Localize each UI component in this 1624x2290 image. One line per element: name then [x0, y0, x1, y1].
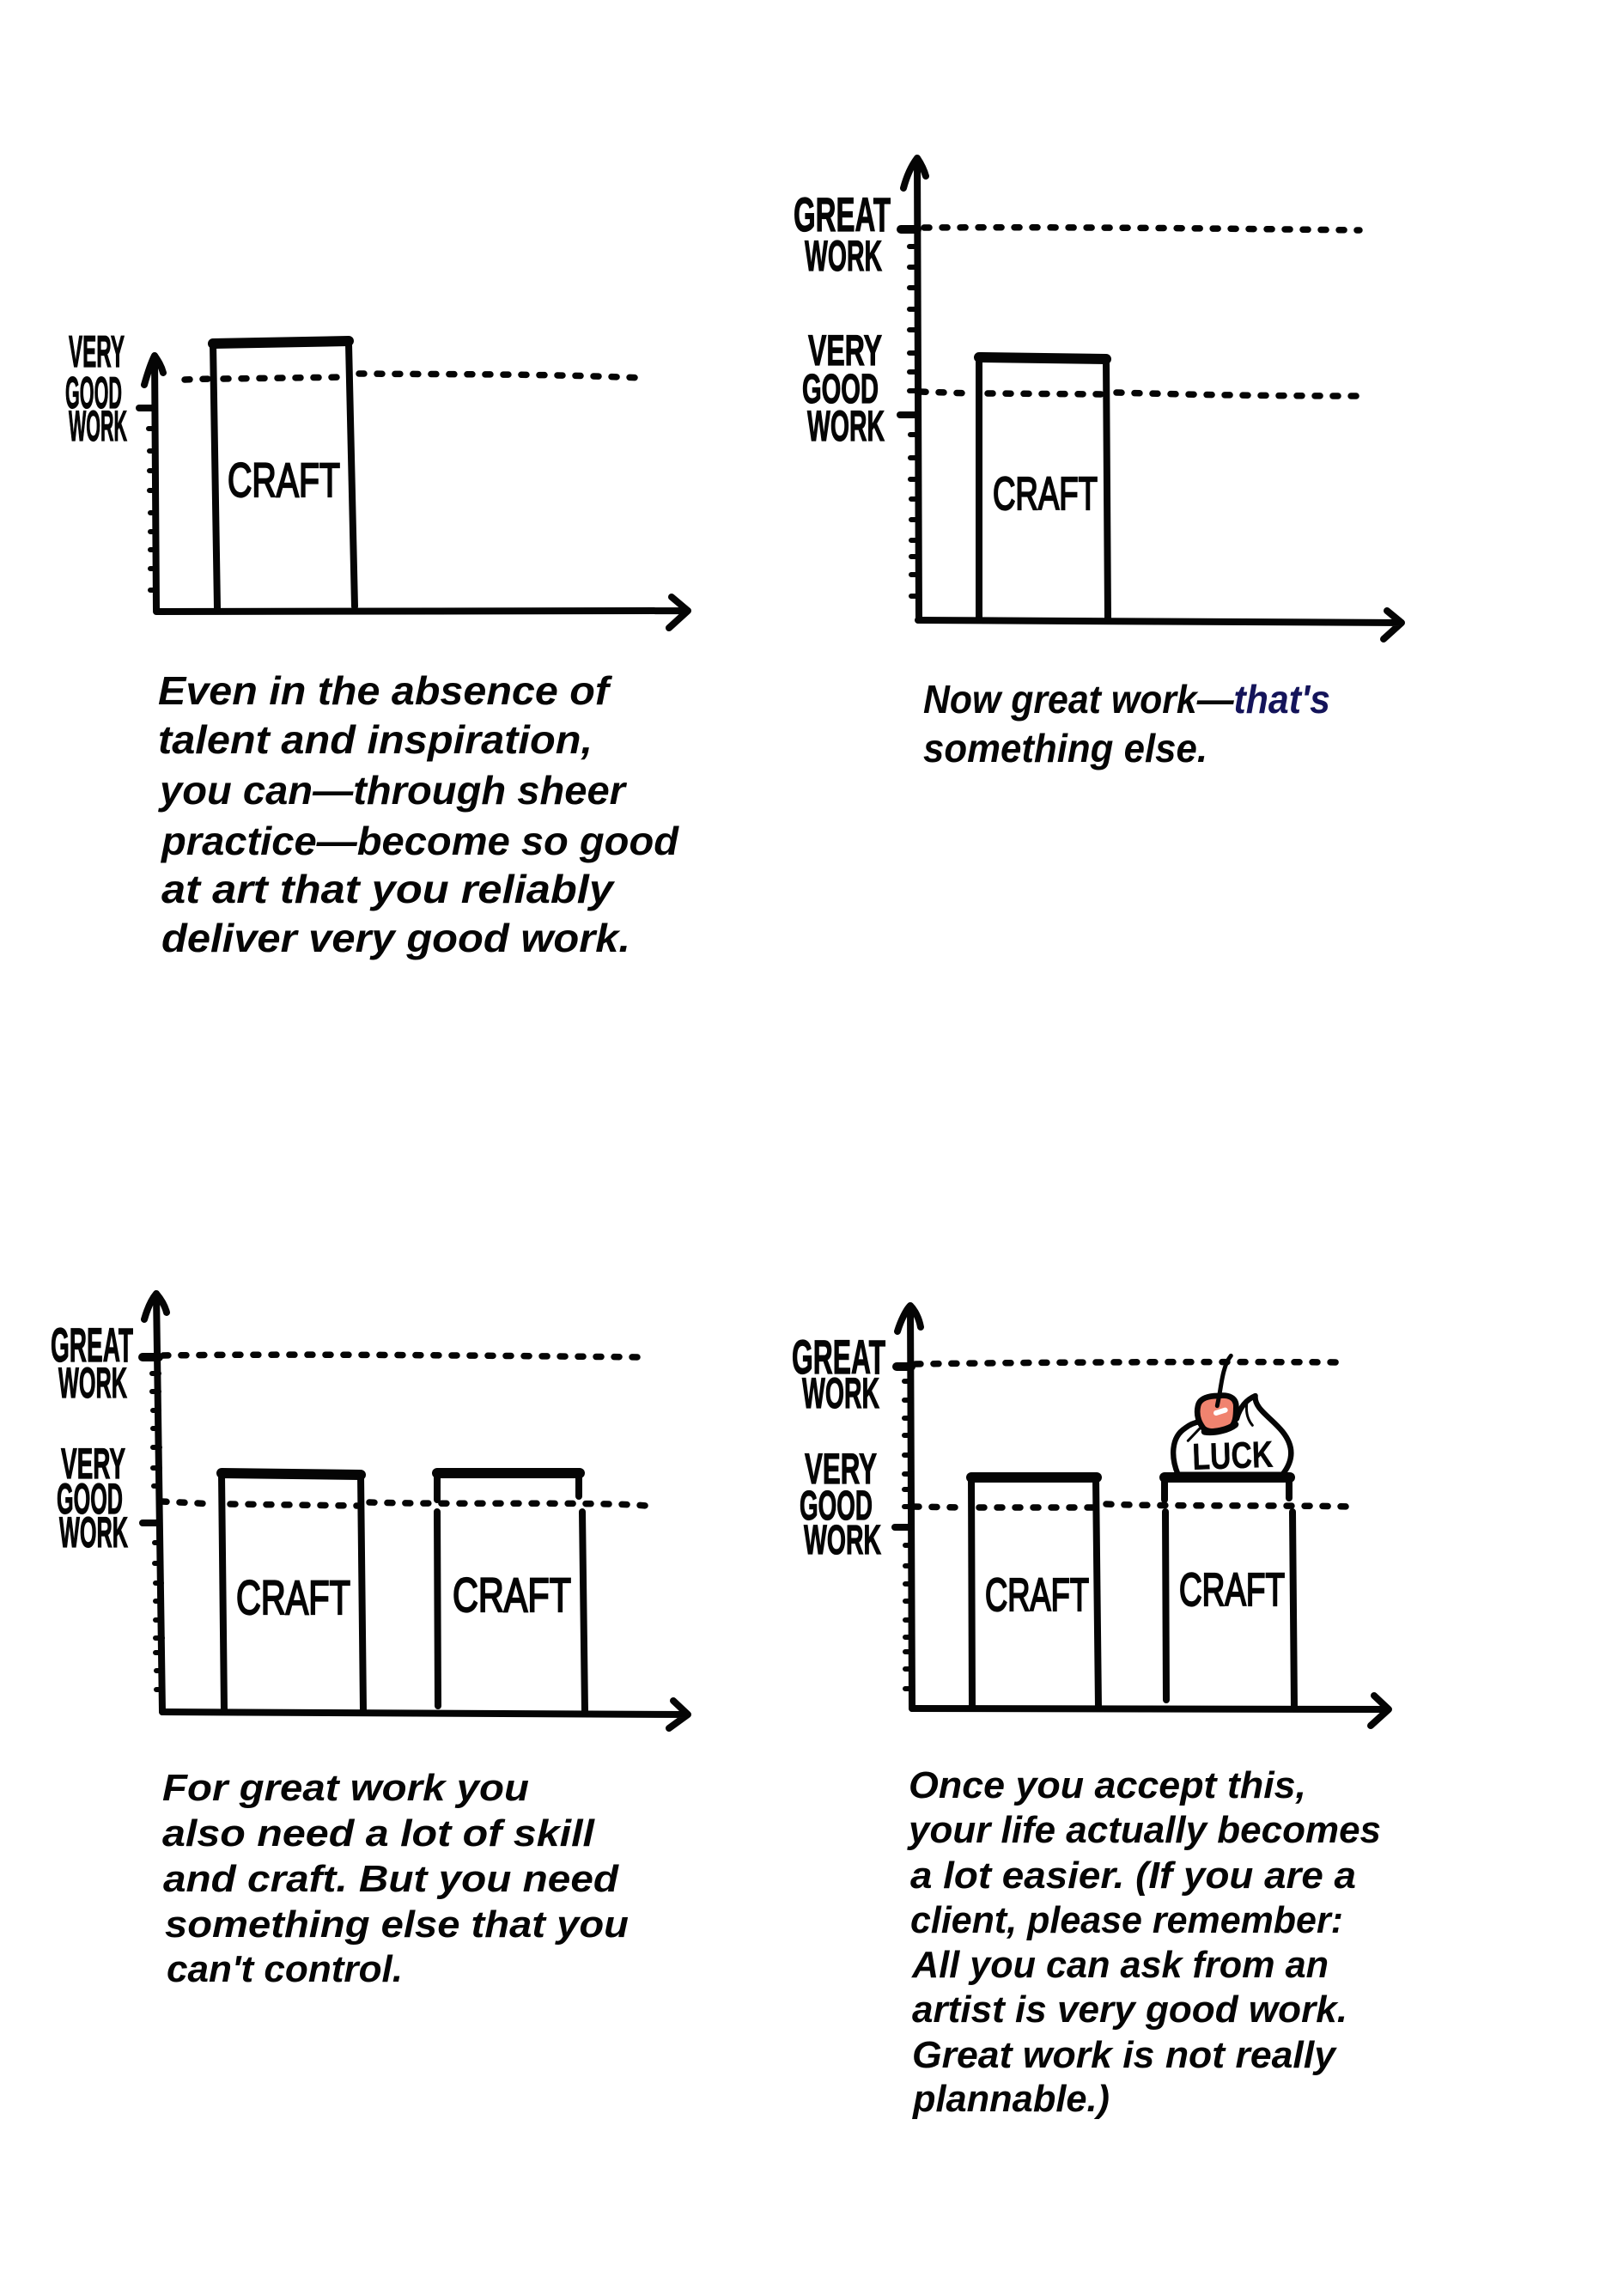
very good work tick	[900, 411, 916, 418]
luck label: LUCK	[1192, 1434, 1274, 1478]
x axis arrow	[918, 611, 1402, 639]
y axis arrow	[144, 356, 163, 610]
very good work tick	[895, 1524, 910, 1531]
panel: great work chart and caption	[794, 158, 1402, 770]
caption: something else: Now great work—that's	[923, 677, 1330, 722]
craft bar	[979, 359, 1108, 618]
caption: accept this: plannable.)	[912, 2078, 1110, 2120]
x axis arrow	[162, 1701, 688, 1728]
caption: something else: something else.	[923, 726, 1207, 770]
great work tick	[901, 225, 917, 234]
y axis arrow	[897, 1306, 921, 1708]
caption: absence of talent: deliver very good work.	[161, 916, 630, 960]
caption: something you can't control: and craft. But you need	[163, 1858, 619, 1900]
cherry underside shadow	[1205, 1424, 1235, 1432]
y axis label: very good work: WORK	[59, 1508, 128, 1556]
cherry	[1197, 1396, 1236, 1432]
second craft bar	[1165, 1477, 1294, 1708]
panel: luck chart and caption	[792, 1306, 1389, 2120]
cream blob	[1173, 1396, 1291, 1475]
second craft bar	[437, 1473, 585, 1711]
y axis label: very good work: WORK	[807, 402, 885, 450]
bar label: craft: CRAFT	[993, 468, 1098, 520]
very good work tick	[143, 1520, 158, 1526]
great work dashed line	[924, 228, 1359, 230]
chart: craft reaches very good work: VERY	[69, 327, 125, 377]
chart: great work above craft	[794, 158, 1402, 639]
caption: something you can't control: something else that you	[165, 1903, 629, 1946]
caption: something you can't control: For great work you	[162, 1767, 529, 1809]
caption: accept this: Once you accept this,	[909, 1764, 1306, 1806]
y axis ticks	[904, 1381, 912, 1689]
x axis arrow	[156, 597, 688, 628]
caption: absence of talent: at art that you reliably	[161, 867, 616, 911]
very good work tick	[139, 405, 154, 411]
caption: something else	[923, 677, 1330, 770]
caption: accept this: All you can ask from an	[911, 1944, 1329, 1986]
y axis label: great work	[792, 1330, 885, 1417]
y axis label: great work: WORK	[802, 1369, 879, 1417]
caption: something you can't control	[162, 1767, 629, 1990]
caption: accept this: artist is very good work.	[912, 1989, 1347, 2031]
bar label: craft: CRAFT	[453, 1568, 571, 1622]
y axis label: very good work	[65, 327, 127, 450]
y axis label: very good work	[57, 1440, 128, 1556]
luck whipped cream topping with cherry	[1173, 1355, 1291, 1478]
caption: absence of talent: practice—become so good	[160, 819, 679, 863]
bar label: craft: CRAFT	[985, 1569, 1089, 1621]
caption: absence of talent	[158, 668, 679, 960]
y axis label: great work: WORK	[58, 1359, 127, 1407]
caption: accept this: a lot easier. (If you are a	[910, 1855, 1356, 1897]
y axis label: very good work: VERY	[808, 326, 882, 375]
y axis label: very good work: GOOD	[802, 367, 879, 412]
panel: two craft bars chart and caption	[51, 1294, 688, 1990]
y axis arrow	[144, 1294, 167, 1712]
x axis arrow	[912, 1696, 1389, 1726]
bar label: craft: CRAFT	[1179, 1564, 1285, 1616]
panel: very good work chart and caption	[65, 327, 688, 960]
caption: accept this: Great work is not really	[912, 2034, 1338, 2076]
chart: craft reaches very good work: WORK	[69, 402, 127, 450]
caption: accept this: your life actually becomes	[907, 1809, 1381, 1851]
cream folds	[1188, 1400, 1252, 1440]
y axis label: very good work: VERY	[805, 1445, 877, 1493]
caption: accept this: client, please remember:	[910, 1899, 1343, 1941]
caption: something you can't control: can't control.	[167, 1948, 403, 1990]
y axis label: very good work	[802, 326, 885, 450]
bar label: craft: CRAFT	[228, 453, 340, 507]
y axis label: very good work: VERY	[61, 1440, 125, 1488]
y axis label: great work	[794, 187, 891, 280]
y axis ticks	[152, 1373, 162, 1690]
chart: craft plus luck	[792, 1306, 1389, 1726]
caption: absence of talent: you can—through sheer	[158, 768, 627, 813]
chart: craft reaches very good work	[65, 327, 688, 628]
cherry stem	[1217, 1355, 1231, 1406]
very good work dashed line	[161, 1501, 647, 1506]
great work dashed line	[915, 1362, 1345, 1364]
caption: something you can't control: also need a lot of skill	[162, 1812, 595, 1855]
caption: accept this	[907, 1764, 1381, 2120]
great work tick	[143, 1353, 159, 1361]
y axis label: great work	[51, 1318, 133, 1407]
chart: two attempts at craft	[51, 1294, 688, 1728]
y axis ticks	[909, 247, 919, 596]
great work tick	[897, 1362, 911, 1371]
first craft bar	[971, 1477, 1098, 1708]
y axis arrow	[903, 158, 926, 620]
y axis label: very good work: GOOD	[800, 1483, 873, 1529]
y axis ticks	[149, 429, 156, 590]
very good work dashed line	[185, 374, 642, 380]
y axis label: great work: GREAT	[51, 1318, 133, 1372]
y axis label: very good work	[800, 1445, 881, 1563]
craft bar	[213, 344, 355, 608]
very good work dashed line	[921, 392, 1364, 396]
chart: craft reaches very good work: GOOD	[65, 368, 122, 418]
cherry highlight	[1216, 1410, 1226, 1413]
bar label: craft: CRAFT	[236, 1570, 350, 1624]
first craft bar	[222, 1473, 363, 1711]
caption: absence of talent: talent and inspiration,	[158, 717, 593, 762]
very good work dashed line	[914, 1504, 1348, 1507]
great work dashed line	[163, 1355, 641, 1357]
y axis label: very good work: GOOD	[57, 1475, 123, 1523]
y axis label: great work: WORK	[805, 232, 882, 280]
y axis label: great work: GREAT	[794, 187, 891, 241]
y axis label: great work: GREAT	[792, 1330, 885, 1384]
caption: absence of talent: Even in the absence of	[158, 668, 613, 713]
y axis label: very good work: WORK	[804, 1518, 881, 1563]
